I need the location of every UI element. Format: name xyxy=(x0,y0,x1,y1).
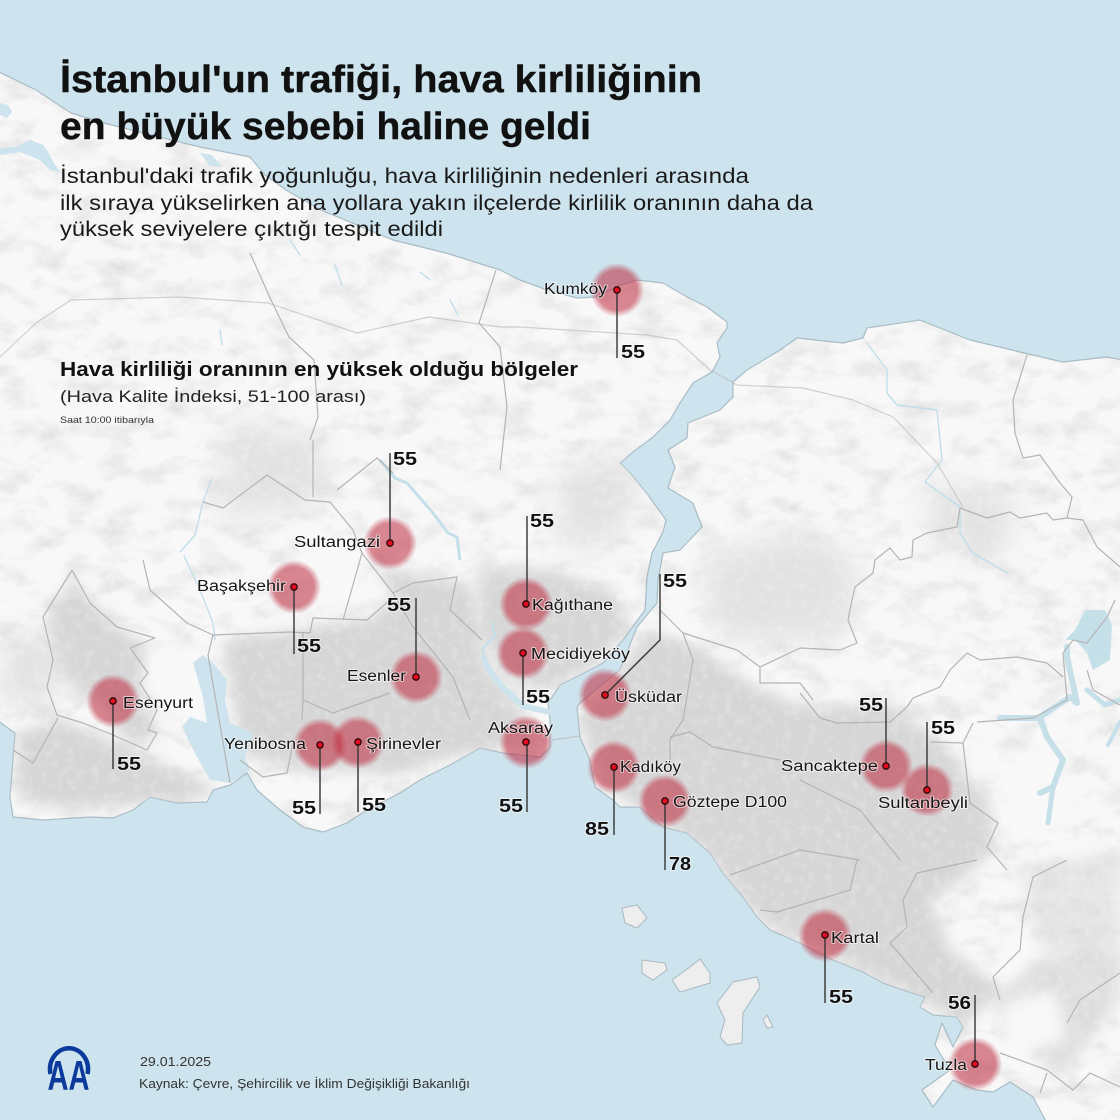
marker: Tuzla xyxy=(925,992,1002,1091)
subtitle text block xyxy=(60,165,813,241)
marker: Başakşehir xyxy=(197,560,321,656)
land: Asian side xyxy=(577,320,1120,1120)
marker: Kartal xyxy=(798,908,879,1007)
label: Sultangazi: Sultangazi xyxy=(294,534,380,551)
time note: Saat 10:00 itibarıyla xyxy=(60,415,155,426)
marker: Şirinevler xyxy=(331,715,441,815)
value: Mecidiyeköy 55: 55 xyxy=(526,686,550,707)
value: Kumköy 55: 55 xyxy=(621,341,645,362)
value: Aksaray 55: 55 xyxy=(499,795,523,816)
value: Tuzla 56: 56 xyxy=(948,992,971,1013)
islands xyxy=(622,905,773,1045)
subtitle text block: yüksek seviyelere çıktığı tespit edildi xyxy=(60,218,443,241)
chart heading: Hava kirliliği oranının en yüksek olduğu bölgeler xyxy=(60,359,578,381)
label: Yenibosna: Yenibosna xyxy=(224,736,306,753)
value: Sultanbeyli 55: 55 xyxy=(931,717,955,738)
label: Başakşehir: Başakşehir xyxy=(197,578,286,595)
label: Göztepe D100: Göztepe D100 xyxy=(673,794,787,811)
value: Sultangazi 55: 55 xyxy=(393,448,417,469)
subtitle text block: İstanbul'daki trafik yoğunluğu, hava kirliliğinin nedenleri arasında xyxy=(60,165,749,188)
footer: source: Kaynak: Çevre, Şehircilik ve İklim Değişikliği Bakanlığı xyxy=(139,1077,470,1091)
title xyxy=(60,59,702,148)
subtitle text block: ilk sıraya yükselirken ana yollara yakın ilçelerde kirlilik oranının daha da xyxy=(60,192,813,215)
map: lakes, rivers and reservoirs xyxy=(0,103,1120,823)
marker: Kumköy xyxy=(544,263,645,362)
label: Mecidiyeköy: Mecidiyeköy xyxy=(531,646,630,663)
label: Kadıköy: Kadıköy xyxy=(620,759,681,776)
map: district borders and highways xyxy=(0,253,1120,1093)
marker: Aksaray xyxy=(488,715,553,816)
marker: Sultanbeyli xyxy=(878,717,968,817)
label: Kağıthane: Kağıthane xyxy=(532,597,613,614)
label: Aksaray: Aksaray xyxy=(488,720,553,737)
icon: AA logo: AA xyxy=(48,1052,90,1099)
marker: Esenyurt xyxy=(86,674,194,774)
label: Sultanbeyli: Sultanbeyli xyxy=(878,795,968,812)
marker: Sancaktepe xyxy=(781,694,913,793)
icon: AA logo xyxy=(48,1048,90,1099)
label: Esenyurt: Esenyurt xyxy=(123,695,194,712)
marker: Yenibosna xyxy=(224,718,347,818)
marker: Esenler xyxy=(347,594,443,704)
value: Şirinevler 55: 55 xyxy=(362,794,386,815)
label: Kumköy: Kumköy xyxy=(544,281,607,298)
label: Üsküdar: Üsküdar xyxy=(615,688,682,706)
marker: Sultangazi xyxy=(294,448,417,570)
value: Esenyurt 55: 55 xyxy=(117,753,141,774)
label: Esenler: Esenler xyxy=(347,668,406,685)
value: Başakşehir 55: 55 xyxy=(297,635,321,656)
marker: Üsküdar xyxy=(578,570,687,722)
land: European side xyxy=(0,71,727,832)
footer: date: 29.01.2025 xyxy=(140,1055,211,1069)
label: Şirinevler: Şirinevler xyxy=(366,736,441,753)
title: İstanbul'un trafiği, hava kirliliğinin xyxy=(60,59,702,101)
value: Üsküdar 55: 55 xyxy=(663,570,687,591)
label: Sancaktepe: Sancaktepe xyxy=(781,758,878,775)
value: Kadıköy 85: 85 xyxy=(585,818,609,839)
value: Göztepe 78: 78 xyxy=(669,853,691,874)
marker: Göztepe D100 xyxy=(638,774,787,874)
value: Sancaktepe 55: 55 xyxy=(859,694,883,715)
value: Esenler 55: 55 xyxy=(387,594,411,615)
title: en büyük sebebi haline geldi xyxy=(60,106,591,148)
marker: Kağıthane xyxy=(499,510,613,631)
chart subheading: index range: (Hava Kalite İndeksi, 51-100 arası) xyxy=(60,387,366,406)
marker: Mecidiyeköy xyxy=(496,626,630,707)
label: Kartal: Kartal xyxy=(831,930,879,947)
label: Tuzla: Tuzla xyxy=(925,1057,967,1074)
value: Kağıthane 55: 55 xyxy=(530,510,554,531)
value: Kartal 55: 55 xyxy=(829,986,853,1007)
value: Yenibosna 55: 55 xyxy=(292,797,316,818)
marker: Kadıköy xyxy=(585,740,681,839)
